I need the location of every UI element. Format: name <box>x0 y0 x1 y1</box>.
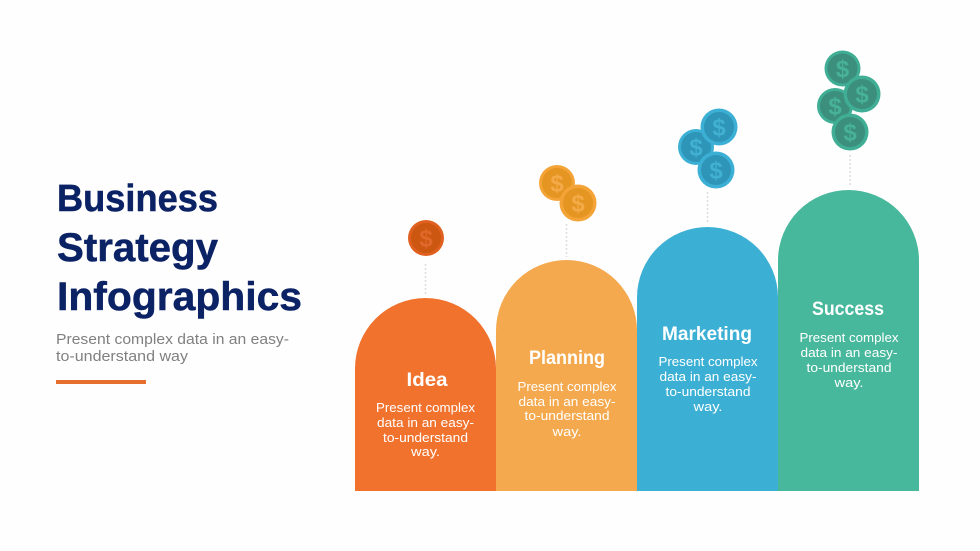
text: planning: Present complex <box>518 379 617 394</box>
heading: marketing: Marketing <box>662 324 752 345</box>
text: marketing: data in an easy- <box>660 369 756 384</box>
dotted connector: success <box>849 155 851 187</box>
text: success: to-understand <box>806 360 892 375</box>
subtitle <box>56 331 289 365</box>
subtitle: Present complex data in an easy- <box>56 331 289 348</box>
panel: idea <box>355 298 496 491</box>
text: idea: to-understand <box>383 430 468 445</box>
dotted connector: idea <box>424 264 426 295</box>
accent line <box>56 380 146 384</box>
icon: marketing coins <box>678 108 738 188</box>
icon: planning coins <box>539 165 596 222</box>
text: marketing: Present complex <box>658 354 758 369</box>
icon: marketing coins: $ <box>712 114 726 142</box>
text: success <box>800 330 899 390</box>
icon: success coins: $ <box>828 94 842 120</box>
text: idea: way. <box>410 444 440 459</box>
icon: success coins <box>817 50 880 150</box>
icon: success coins: $ <box>843 120 857 146</box>
icon: marketing coins: $ <box>709 158 723 184</box>
icon: success coins: $ <box>836 56 850 83</box>
icon: idea coin: $ <box>419 226 433 252</box>
icon: idea coin <box>408 220 444 256</box>
text: marketing: way. <box>692 399 722 414</box>
text: marketing <box>658 354 758 414</box>
text: success: Present complex <box>800 330 899 345</box>
icon: marketing coins: $ <box>689 134 703 162</box>
text: planning <box>518 379 617 439</box>
panel: marketing <box>637 227 778 491</box>
text: marketing: to-understand <box>666 384 750 399</box>
text: success: data in an easy- <box>800 345 898 360</box>
text: idea: Present complex <box>376 400 476 415</box>
dotted connector: planning <box>566 224 568 257</box>
title: Business <box>57 178 218 220</box>
title <box>57 178 302 319</box>
panel: planning <box>496 260 637 491</box>
heading: idea: Idea <box>406 370 448 391</box>
text: idea: data in an easy- <box>377 415 474 430</box>
icon: planning coins: $ <box>550 170 564 198</box>
text: idea <box>376 400 476 459</box>
dotted connector: marketing <box>706 192 708 224</box>
text: planning: to-understand <box>524 408 610 423</box>
text: planning: data in an easy- <box>518 394 616 409</box>
heading: planning: Planning <box>529 348 605 369</box>
heading: success: Success <box>812 299 884 320</box>
title: Infographics <box>57 275 302 319</box>
text: planning: way. <box>551 424 582 439</box>
subtitle: to-understand way <box>56 348 189 365</box>
icon: success coins: $ <box>855 82 869 108</box>
panel: success <box>778 190 919 491</box>
icon: planning coins: $ <box>571 190 585 218</box>
text: success: way. <box>833 375 864 390</box>
title: Strategy <box>57 226 219 270</box>
